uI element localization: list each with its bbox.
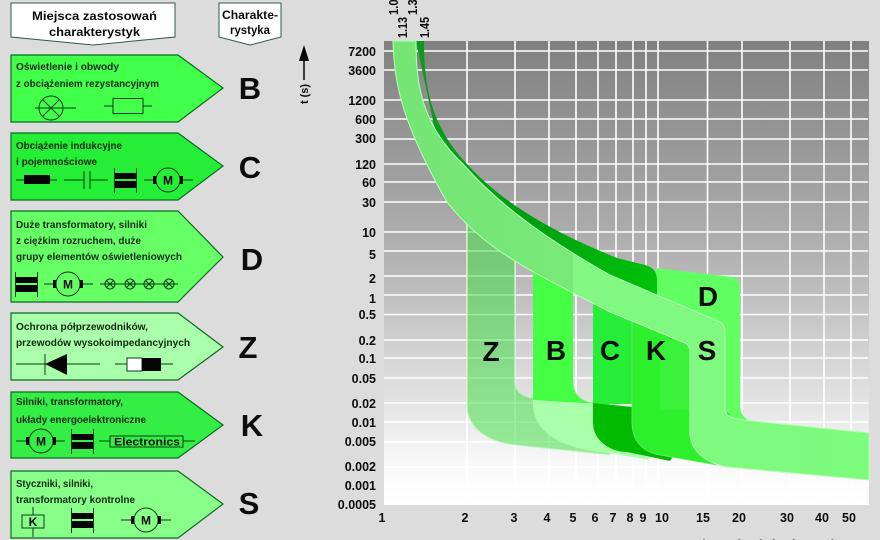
current axis labels: 50 (842, 511, 856, 525)
time axis labels: 600 (355, 113, 376, 127)
letter B: B (239, 71, 261, 106)
panel: characteristic D: Duże transformatory, silniki (16, 219, 147, 231)
panel: characteristic S: transformatory kontrolne (16, 494, 135, 506)
curve multiplier labels: 1.13 (396, 17, 410, 38)
curve D (656, 268, 748, 422)
panel: characteristic D (11, 211, 223, 302)
current axis labels: 40 (815, 511, 829, 525)
time axis labels (338, 45, 376, 512)
time axis labels: 0.2 (359, 334, 376, 348)
time axis labels: 1 (369, 292, 376, 306)
panel: characteristic B: z obciążeniem rezystancyjnym (16, 78, 159, 90)
header: characteristic: Charakte- (222, 8, 278, 22)
curve Z (467, 215, 610, 455)
time axis labels: 10 (362, 226, 376, 240)
header: application areas: Miejsca zastosowań (32, 9, 157, 23)
time axis labels: 120 (355, 158, 376, 172)
time axis labels: 0.01 (352, 416, 376, 430)
chart letter C: C (600, 335, 620, 366)
header: application areas (11, 3, 175, 45)
current axis labels: 30 (780, 511, 794, 525)
curve C upper (593, 290, 636, 404)
curve multiplier labels: 1.45 (418, 17, 432, 38)
panel: characteristic K: Electronics (114, 436, 180, 448)
chart letter S: S (698, 335, 716, 366)
plot background (384, 41, 869, 505)
header: characteristic: rystyka (230, 23, 270, 37)
time axis labels: 0.001 (345, 479, 376, 493)
dark upper edge curve (416, 41, 657, 300)
curve B upper (533, 250, 592, 403)
panel: characteristic C: Obciążenie indukcyjne (16, 140, 122, 152)
time axis labels: 0.05 (352, 372, 376, 386)
panel: characteristic S (11, 471, 223, 538)
grid lines (384, 41, 868, 505)
header: application areas: charakterystyk (49, 25, 140, 39)
main light band curve S (393, 41, 869, 480)
curve K (632, 300, 730, 465)
time axis labels: 0.02 (352, 397, 376, 411)
current axis labels: 4 (544, 511, 551, 525)
panel: characteristic B (11, 55, 223, 122)
current axis labels: 9 (640, 511, 647, 525)
panel: characteristic C (11, 133, 223, 200)
panel: characteristic Z: przewodów wysokoimpedancyjnych (16, 337, 190, 349)
time axis labels: 0.1 (359, 352, 376, 366)
letter D: D (241, 242, 263, 277)
chart letter D: D (698, 281, 718, 312)
current axis labels: 6 (592, 511, 599, 525)
current axis labels: 8 (627, 511, 634, 525)
panel: characteristic K: Silniki, transformatory, (16, 396, 123, 408)
letter C: C (239, 150, 261, 185)
current axis labels: 20 (732, 511, 746, 525)
time axis labels: 30 (362, 196, 376, 210)
curve B lower (533, 400, 650, 460)
current axis labels: 2 (462, 511, 469, 525)
panel: characteristic D: grupy elementów oświetleniowych (16, 251, 182, 263)
panel: characteristic K: układy energoelektroniczne (16, 414, 146, 426)
current axis labels: 1 (379, 511, 386, 525)
time axis arrow (299, 45, 311, 104)
panel: characteristic S: K (29, 515, 38, 529)
panel: characteristic B: Oświetlenie i obwody (16, 61, 119, 73)
time axis labels: 0.005 (345, 435, 376, 449)
time axis labels: 0.0005 (338, 498, 376, 512)
current axis labels: 5 (570, 511, 577, 525)
letter S: S (239, 486, 259, 521)
current axis labels: 10 (655, 511, 669, 525)
time axis labels: 0.002 (345, 460, 376, 474)
time axis labels: 5 (369, 248, 376, 262)
current axis labels: 15 (696, 511, 710, 525)
current axis labels (379, 511, 856, 525)
chart letter B: B (546, 335, 566, 366)
time axis labels: 1200 (348, 94, 376, 108)
letter K: K (241, 408, 264, 443)
current axis labels: 7 (610, 511, 617, 525)
chart: tripping characteristics (384, 41, 869, 505)
time axis labels: 300 (355, 132, 376, 146)
chart letter Z: Z (482, 336, 500, 367)
panel: characteristic D: z ciężkim rozruchem, duże (16, 235, 141, 247)
time axis labels: 60 (362, 176, 376, 190)
letter Z: Z (239, 330, 258, 365)
panel: characteristic S: M (141, 514, 151, 528)
panel: characteristic Z: Ochrona półprzewodników, (16, 321, 148, 333)
curve K inner tint (660, 340, 690, 410)
header: characteristic (219, 3, 281, 45)
panel: characteristic S: Styczniki, silniki, (16, 478, 93, 490)
panel: characteristic C: i pojemnościowe (16, 156, 97, 168)
panel: characteristic K: M (36, 434, 46, 448)
time axis arrow: t (s) (299, 84, 311, 104)
panel: characteristic Z (11, 313, 223, 380)
chart letter K: K (646, 335, 666, 366)
time axis labels: 7200 (348, 45, 376, 59)
panel: characteristic C: M (163, 174, 173, 188)
curve C lower (593, 403, 700, 461)
curve multiplier labels (387, 0, 432, 38)
time axis labels: 2 (369, 272, 376, 286)
current axis labels: 3 (511, 511, 518, 525)
time axis labels: 0.5 (359, 308, 376, 322)
panel: characteristic K (11, 392, 223, 458)
time axis labels: 3600 (348, 64, 376, 78)
panel: characteristic D: M (63, 278, 73, 292)
